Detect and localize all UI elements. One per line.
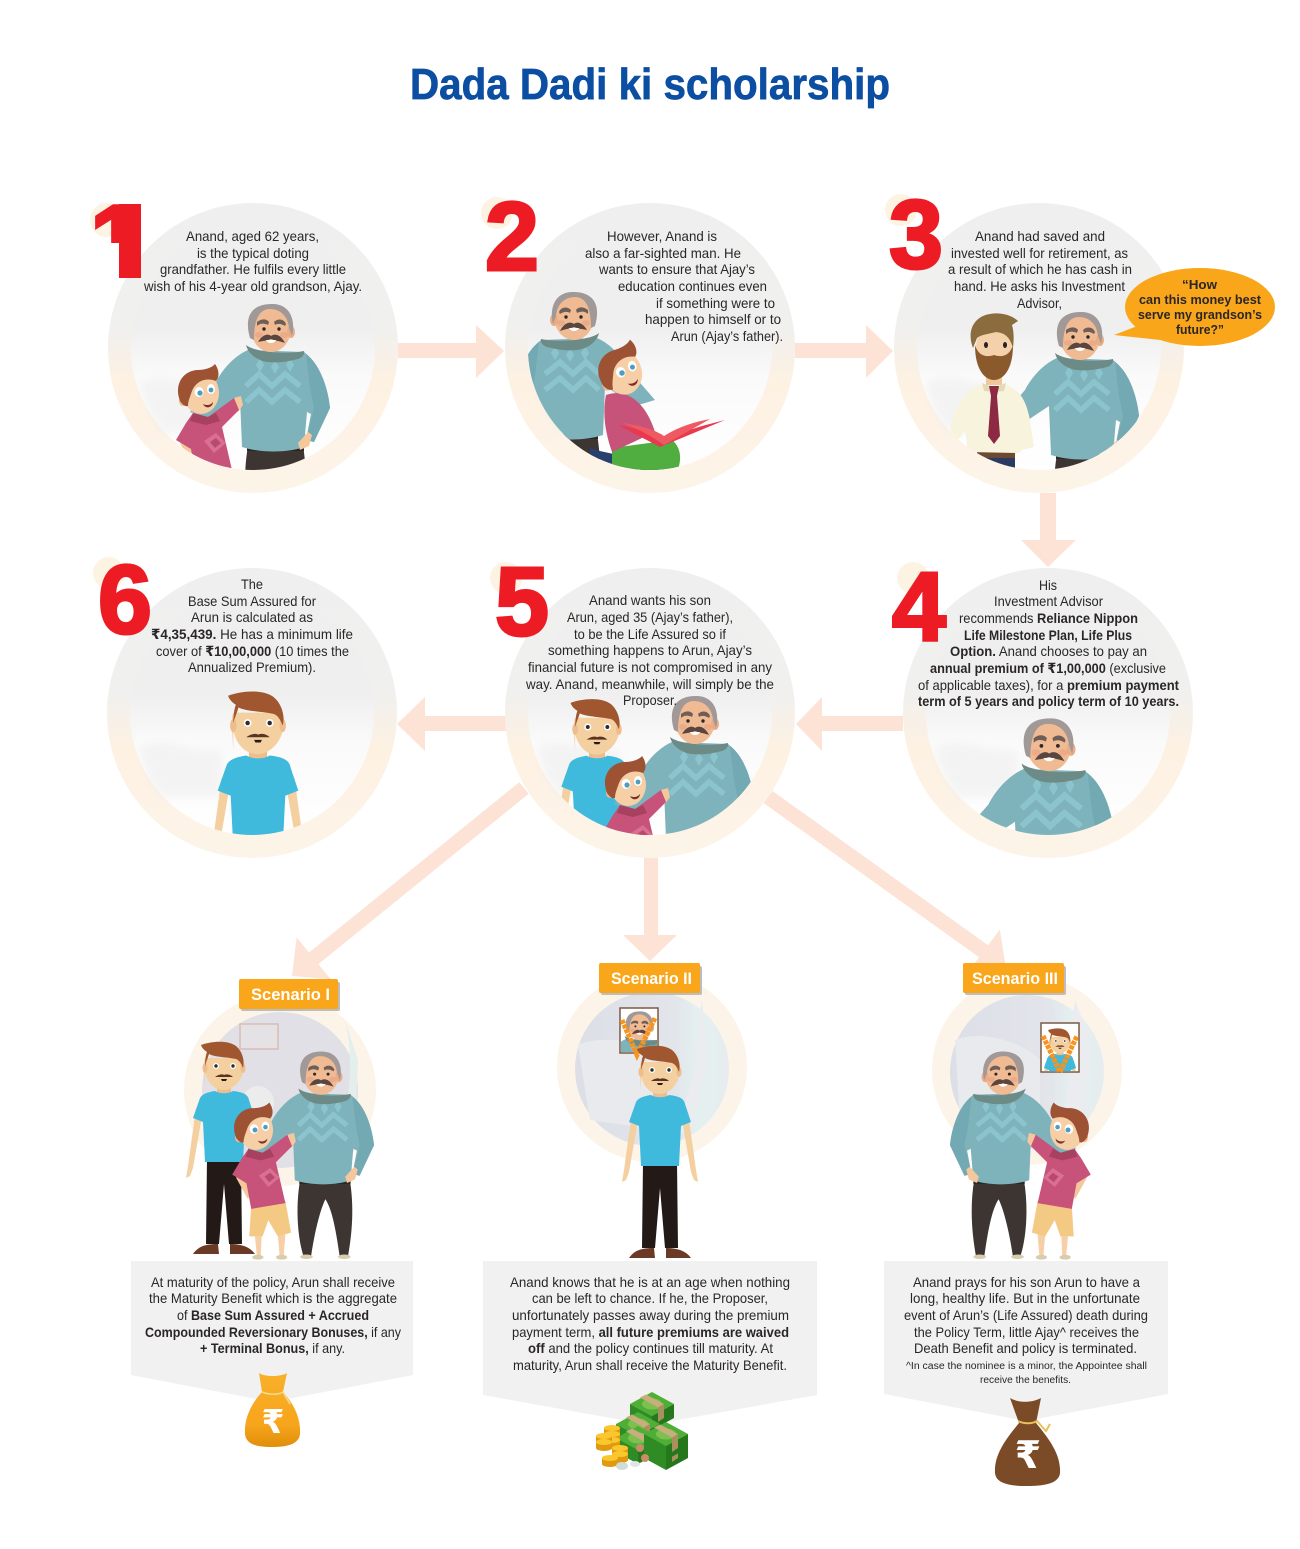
step text: His (1039, 577, 1057, 593)
step number: 4 (892, 552, 946, 661)
scenario badge (239, 979, 340, 1011)
circle background (107, 568, 397, 858)
scenario backdrop circle (557, 972, 747, 1162)
scenario text (145, 1274, 401, 1356)
number background blob (90, 203, 124, 237)
step text: Option. Anand chooses to pay an (950, 643, 1147, 659)
step text: education continues even (618, 278, 767, 294)
circle background (903, 568, 1193, 858)
step text (918, 577, 1179, 709)
step text: financial future is not compromised in any (528, 659, 772, 675)
illustration: open book (618, 419, 725, 447)
number background blob (897, 562, 929, 594)
panel: step 2 (481, 197, 795, 493)
scenario text: unfortunately passes away during the premium (512, 1307, 789, 1323)
step text (143, 228, 362, 294)
panel: step 5 (490, 562, 795, 858)
scenario text: At maturity of the policy, Arun shall receive (151, 1274, 395, 1290)
callout: speech bubble: can this money best (1139, 292, 1262, 307)
step text: Annualized Premium). (188, 659, 316, 675)
step text: if something were to (656, 295, 775, 311)
callout: speech bubble: serve my grandson’s (1138, 307, 1262, 322)
arrow: step 2 to step 3 (795, 325, 893, 378)
step text: also a far-sighted man. He (585, 245, 741, 261)
icon: gold money bag (245, 1373, 300, 1447)
step text: However, Anand is (607, 228, 717, 244)
scenario backdrop circle (184, 994, 376, 1186)
scenario text: the Maturity Benefit which is the aggregate (149, 1290, 397, 1306)
step text: wish of his 4-year old grandson, Ajay. (143, 278, 362, 294)
framed portrait with garland (619, 1007, 659, 1061)
scenario badge (963, 963, 1066, 995)
callout: speech bubble: “How (1182, 277, 1218, 292)
arrow: step 4 to step 5 (796, 697, 903, 751)
step text: Anand wants his son (589, 592, 711, 608)
arrow: step 5 to step 6 (397, 697, 508, 751)
step text: way. Anand, meanwhile, will simply be the (525, 676, 774, 692)
number background blob (490, 562, 522, 594)
step text: Base Sum Assured for (188, 593, 316, 609)
step text: to be the Life Assured so if (574, 626, 726, 642)
number background blob (885, 194, 917, 226)
step text: wants to ensure that Ajay’s (598, 261, 755, 277)
step text: is the typical doting (197, 245, 309, 261)
step number: 1 (90, 185, 144, 294)
step text: cover of ₹10,00,000 (10 times the (156, 643, 349, 659)
step text: grandfather. He fulfils every little (160, 261, 346, 277)
illustration: father Arun (622, 1046, 698, 1258)
icon: stacks of cash and coins (596, 1392, 688, 1470)
scenario badge: Scenario I (251, 985, 330, 1004)
step text: Arun (Ajay’s father). (671, 328, 783, 344)
panel: step 6 (93, 557, 397, 858)
scenario text: ^In case the nominee is a minor, the Appointee shall (906, 1361, 1147, 1372)
scenario badge: Scenario III (972, 969, 1058, 988)
step text (948, 228, 1132, 311)
step text: invested well for retirement, as (951, 245, 1128, 261)
step text: of applicable taxes), for a premium payment (918, 677, 1179, 693)
scenario text: Death Benefit and policy is terminated. (914, 1340, 1137, 1356)
arrow: to scenario II (623, 857, 677, 961)
scenario text: receive the benefits. (980, 1375, 1071, 1386)
step text: something happens to Arun, Ajay’s (548, 642, 752, 658)
circle background (108, 203, 398, 493)
step text: a result of which he has cash in (948, 261, 1132, 277)
arrow: to scenario III (764, 791, 1006, 973)
callout: speech bubble: future?” (1176, 322, 1224, 337)
scenario text: Anand prays for his son Arun to have a (913, 1274, 1140, 1290)
arrow: to scenario I (292, 782, 529, 979)
step text: term of 5 years and policy term of 10 years. (918, 693, 1179, 709)
circle background (894, 203, 1184, 493)
text panel (884, 1261, 1168, 1421)
step number (95, 204, 141, 278)
scenario badge: Scenario II (611, 969, 692, 988)
scenario text: off and the policy continues till maturity. At (528, 1340, 773, 1356)
step text (585, 228, 783, 344)
panel: step 3 (885, 194, 1275, 493)
illustration: family of three (561, 696, 751, 835)
icon: brown money bag (995, 1398, 1060, 1486)
step text: hand. He asks his Investment (954, 278, 1125, 294)
circle background (505, 568, 795, 858)
step text (151, 576, 353, 675)
step number: 3 (889, 180, 943, 289)
step number: 2 (485, 182, 539, 291)
scenario backdrop circle (932, 975, 1122, 1165)
step text: Advisor, (1017, 295, 1062, 311)
step text: The (241, 576, 263, 592)
step text: annual premium of ₹1,00,000 (exclusive (930, 660, 1166, 676)
step text: Anand, aged 62 years, (186, 228, 319, 244)
icon: gold money bag: ₹ (262, 1403, 284, 1440)
illustration: family of three (186, 1042, 374, 1260)
scenario text (904, 1274, 1148, 1386)
scenario text (510, 1274, 790, 1373)
number background blob (481, 197, 513, 229)
title: Dada Dadi ki scholarship (410, 60, 890, 109)
arrow: step 1 to step 2 (398, 325, 504, 378)
scenario badge (599, 963, 702, 995)
scenario text: long, healthy life. But in the unfortunate (910, 1290, 1140, 1306)
scenario text: Anand knows that he is at an age when nothing (510, 1274, 790, 1290)
panel: scenario II (483, 963, 817, 1470)
illustration: father Arun (214, 692, 301, 835)
text panel (131, 1261, 413, 1402)
circle background (505, 203, 795, 493)
scenario text: can be left to chance. If he, the Proposer, (532, 1290, 768, 1306)
step text: Life Milestone Plan, Life Plus (964, 627, 1132, 643)
illustration: grandfather and investment advisor (950, 312, 1139, 469)
arrow: step 3 to step 4 (1021, 493, 1076, 567)
callout: speech bubble (1114, 268, 1275, 346)
step text: Proposer. (623, 692, 677, 708)
panel: step 1 (90, 203, 398, 493)
step text: ₹4,35,439. He has a minimum life (151, 626, 353, 642)
step text: Anand had saved and (975, 228, 1105, 244)
step text: happen to himself or to (645, 311, 781, 327)
icon: brown money bag: ₹ (1015, 1435, 1041, 1477)
scenario text: + Terminal Bonus, if any. (200, 1340, 345, 1356)
step number: 6 (98, 545, 152, 654)
illustration: grandfather reading to grandson (528, 292, 680, 470)
scenario text: event of Arun’s (Life Assured) death during (904, 1307, 1148, 1323)
panel: scenario III (884, 963, 1168, 1486)
panel: scenario I (131, 979, 413, 1447)
step text: recommends Reliance Nippon (959, 610, 1138, 626)
illustration: grandfather (980, 718, 1112, 835)
panel: step 4 (892, 562, 1193, 858)
illustration: grandfather and grandson (176, 304, 330, 470)
step text: Arun is calculated as (191, 609, 313, 625)
text panel (483, 1261, 817, 1425)
scenario text: maturity, Arun shall receive the Maturity Benefit. (513, 1357, 787, 1373)
step text (525, 592, 774, 708)
scenario text: of Base Sum Assured + Accrued (177, 1307, 369, 1323)
step number: 5 (495, 547, 549, 656)
scenario text: Compounded Reversionary Bonuses, if any (145, 1324, 401, 1340)
number background blob (93, 557, 125, 589)
scenario text: the Policy Term, little Ajay^ receives the (914, 1324, 1139, 1340)
scenario text: payment term, all future premiums are waived (512, 1324, 789, 1340)
step text: Investment Advisor (994, 593, 1103, 609)
illustration: grandfather and worried grandson (950, 1052, 1091, 1260)
step text: Arun, aged 35 (Ajay’s father), (567, 609, 733, 625)
framed portrait with garland (1040, 1022, 1080, 1073)
